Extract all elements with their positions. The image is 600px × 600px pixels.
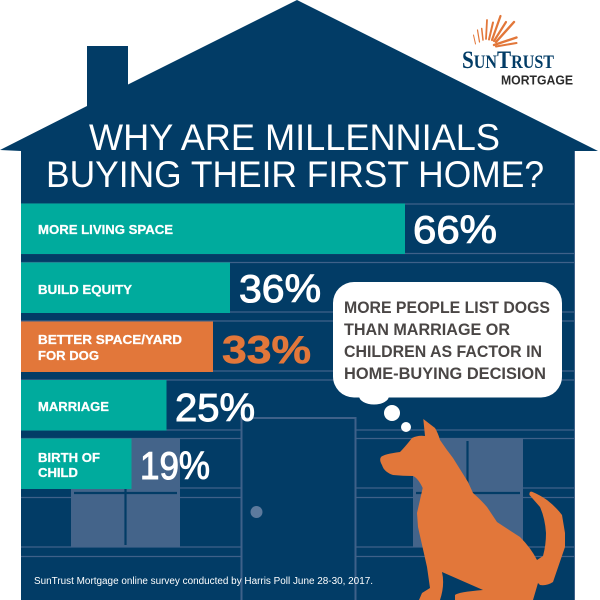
- title: WHY ARE MILLENNIALS: [89, 116, 500, 158]
- bar: marriage 25%: [21, 380, 255, 430]
- bar: better space/yard for dog 33%: [21, 322, 311, 372]
- speech bubble callout: HOME-BUYING DECISION: [344, 364, 546, 383]
- icon: sunburst: [474, 16, 516, 46]
- bar: build equity 36%: [21, 262, 321, 313]
- logo: SunTrust Mortgage: [462, 16, 573, 88]
- bar: birth of child 19%: CHILD: [38, 466, 78, 480]
- bar: more living space 66%: 66%: [413, 209, 497, 252]
- title: [46, 116, 544, 195]
- sub-brand: MORTGAGE: [501, 74, 573, 88]
- bar: birth of child 19%: [21, 438, 210, 489]
- speech bubble callout: [333, 282, 562, 432]
- wordmark: SUNTRUST: [462, 47, 554, 74]
- bar: better space/yard for dog 33%: BETTER SPACE/YARD: [38, 333, 182, 347]
- bar: more living space 66%: [21, 204, 497, 254]
- speech bubble callout: THAN MARRIAGE OR: [344, 320, 510, 339]
- bar: marriage 25%: 25%: [175, 387, 255, 430]
- bar: better space/yard for dog 33%: 33%: [222, 329, 311, 372]
- right window: [413, 438, 523, 547]
- icon: sitting dog: [380, 419, 565, 600]
- speech bubble callout: CHILDREN AS FACTOR IN: [344, 342, 542, 361]
- door: [242, 418, 356, 600]
- bar: marriage 25%: MARRIAGE: [38, 400, 109, 414]
- title: BUYING THEIR FIRST HOME?: [46, 153, 544, 195]
- bar: better space/yard for dog 33%: FOR DOG: [38, 349, 99, 363]
- footnote: SunTrust Mortgage online survey conducted by Harris Poll June 28-30, 2017.: [34, 576, 373, 587]
- bar: build equity 36%: BUILD EQUITY: [38, 283, 133, 297]
- bar: birth of child 19%: BIRTH OF: [38, 451, 100, 465]
- bar: more living space 66%: MORE LIVING SPACE: [38, 223, 173, 237]
- speech bubble callout: MORE PEOPLE LIST DOGS: [344, 298, 550, 317]
- bar: build equity 36%: 36%: [239, 268, 321, 311]
- bar: birth of child 19%: 19%: [140, 445, 210, 488]
- left window: [71, 438, 180, 547]
